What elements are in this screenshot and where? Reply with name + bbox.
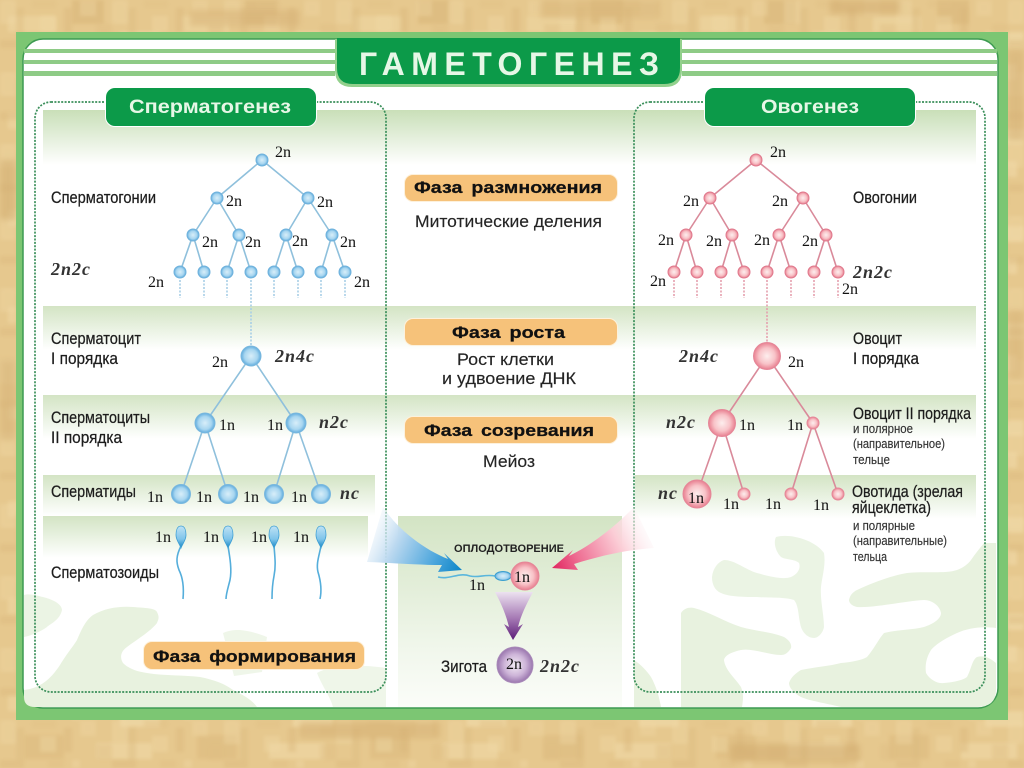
stage labels right: Овоцит II порядка: [853, 404, 971, 423]
phase: reproduction: Митотические деления: [415, 212, 602, 231]
stage labels left: Сперматиды: [51, 482, 136, 501]
spermatogenesis diagram: [50, 144, 370, 599]
oogenesis diagram: [650, 144, 971, 564]
ploidy labels left tree: 1n: [203, 529, 219, 546]
ploidy labels left tree: 2n: [226, 193, 242, 210]
horizontal gradient bands: [43, 110, 976, 707]
ploidy labels left tree: 1n: [267, 417, 283, 434]
stage labels right: и полярное: [853, 421, 913, 436]
chromosome formulas left: nc: [340, 483, 360, 503]
oocytes, ootid and polar bodies: [683, 342, 844, 508]
stage labels right: (направительные): [853, 533, 947, 548]
dashed lines from last generation: [180, 280, 345, 346]
stage labels left: [51, 188, 159, 582]
ploidy labels left tree: 1n: [219, 417, 235, 434]
spermatozoa: [176, 526, 326, 599]
phase: growth: и удвоение ДНК: [442, 369, 576, 388]
phase: growth: [404, 318, 618, 388]
ploidy labels right tree: 2n: [842, 281, 858, 298]
egg: 1n: [514, 569, 530, 586]
chromosome formulas left: 2n2c: [50, 259, 91, 279]
ploidy labels left tree: 2n: [275, 144, 291, 161]
ploidy labels right tree: 2n: [650, 273, 666, 290]
branch lines: oogonia tree: [674, 160, 838, 494]
chromosome formulas left: n2c: [319, 412, 349, 432]
phase: growth: Рост клетки: [457, 350, 554, 369]
stage labels left: Сперматозоиды: [51, 563, 159, 582]
ploidy labels right tree: 2n: [788, 354, 804, 371]
spermatocytes and spermatids: [172, 346, 330, 504]
phase: maturation: [404, 416, 618, 471]
stage labels left: II порядка: [51, 428, 122, 447]
ploidy labels left tree: 2n: [202, 234, 218, 251]
phase: maturation: Фаза созревания: [424, 421, 594, 440]
spermatogonia cells: [174, 154, 351, 278]
ploidy labels left tree: 1n: [155, 529, 171, 546]
phase: reproduction: Фаза размножения: [414, 178, 602, 197]
chromosome formulas left: [50, 259, 360, 503]
stage labels right: тельце: [853, 452, 890, 467]
panel: oogenesis outline: [634, 102, 985, 692]
heading: spermatogenesis: Сперматогенез: [129, 97, 291, 118]
pale background blobs: [24, 536, 996, 707]
ploidy labels right tree: 1n: [688, 490, 704, 507]
stage labels right: яйцеклетка): [852, 498, 931, 517]
ploidy labels left tree: 1n: [293, 529, 309, 546]
phase: growth: Фаза роста: [452, 323, 566, 342]
ploidy labels left tree: 2n: [148, 274, 164, 291]
oogonia cells: [668, 154, 844, 278]
ploidy labels right tree: 2n: [772, 193, 788, 210]
ploidy labels left tree: 1n: [251, 529, 267, 546]
ploidy labels left tree: 1n: [196, 489, 212, 506]
ploidy labels left tree: [147, 144, 370, 546]
stage labels left: I порядка: [51, 349, 118, 368]
chromosome formulas left: 2n4c: [274, 346, 315, 366]
phase: formation: [143, 641, 365, 670]
ploidy labels right tree: [650, 144, 858, 514]
phase: formation: Фаза формирования: [153, 647, 356, 666]
ploidy labels right tree: 1n: [723, 496, 739, 513]
stage labels right: [852, 188, 971, 564]
stage labels left: Сперматоцит: [51, 329, 141, 348]
arrow: pink funnel: [552, 507, 654, 570]
phase: reproduction: [404, 174, 618, 231]
ploidy labels right tree: 2n: [802, 233, 818, 250]
arrow: purple funnel: [495, 592, 533, 640]
zygote: [441, 647, 580, 683]
zygote: Зигота: [441, 657, 487, 676]
title: ГАМЕТОГЕНЕЗ: [359, 46, 659, 82]
chromosome formulas right: n2c: [666, 412, 696, 432]
heading: oogenesis: [704, 87, 916, 127]
phase: maturation: Мейоз: [483, 452, 535, 471]
stage labels right: Овоцит: [853, 329, 902, 348]
chromosome formulas right: 2n4c: [678, 346, 719, 366]
ploidy labels right tree: 2n: [683, 193, 699, 210]
stage labels left: Сперматоциты: [51, 408, 150, 427]
stage labels right: и полярные: [853, 518, 915, 533]
arrow: blue funnel: [367, 507, 462, 572]
ploidy labels left tree: 1n: [243, 489, 259, 506]
dashed lines from last generation: [674, 280, 838, 342]
ploidy labels left tree: 2n: [212, 354, 228, 371]
heading: oogenesis: Овогенез: [761, 97, 859, 118]
stage labels right: Овогонии: [853, 188, 917, 207]
title: [335, 38, 682, 87]
sperm ploidy: 1n: [469, 577, 485, 594]
ploidy labels left tree: 1n: [291, 489, 307, 506]
ploidy labels left tree: 2n: [292, 233, 308, 250]
ploidy labels left tree: 2n: [354, 274, 370, 291]
ploidy labels right tree: 1n: [787, 417, 803, 434]
chromosome formulas right: [658, 262, 893, 503]
chromosome formulas right: nc: [658, 483, 678, 503]
fertilization label: ОПЛОДОТВОРЕНИЕ: [454, 543, 564, 555]
ploidy labels left tree: 1n: [147, 489, 163, 506]
sperm: [438, 572, 511, 580]
zygote: 2n2c: [539, 656, 580, 676]
top stripes: [24, 49, 997, 76]
ploidy labels left tree: 2n: [317, 194, 333, 211]
stage labels left: Сперматогонии: [51, 188, 156, 207]
stage labels right: I порядка: [853, 349, 919, 368]
fertilization: [438, 543, 564, 594]
heading: spermatogenesis: [105, 87, 317, 127]
panel: spermatogenesis outline: [35, 102, 386, 692]
ploidy labels right tree: 1n: [813, 497, 829, 514]
ploidy labels right tree: 2n: [770, 144, 786, 161]
ploidy labels left tree: 2n: [340, 234, 356, 251]
chromosome formulas right: 2n2c: [852, 262, 893, 282]
stage labels right: тельца: [853, 549, 888, 564]
stage labels right: (направительное): [853, 436, 945, 451]
ploidy labels left tree: 2n: [245, 234, 261, 251]
ploidy labels right tree: 1n: [765, 496, 781, 513]
ploidy labels right tree: 1n: [739, 417, 755, 434]
ploidy labels right tree: 2n: [754, 232, 770, 249]
zygote: 2n: [506, 656, 522, 673]
branch lines: spermatogonia tree: [180, 160, 345, 494]
ploidy labels right tree: 2n: [658, 232, 674, 249]
stage labels right: Овотида (зрелая: [852, 482, 963, 501]
ploidy labels right tree: 2n: [706, 233, 722, 250]
